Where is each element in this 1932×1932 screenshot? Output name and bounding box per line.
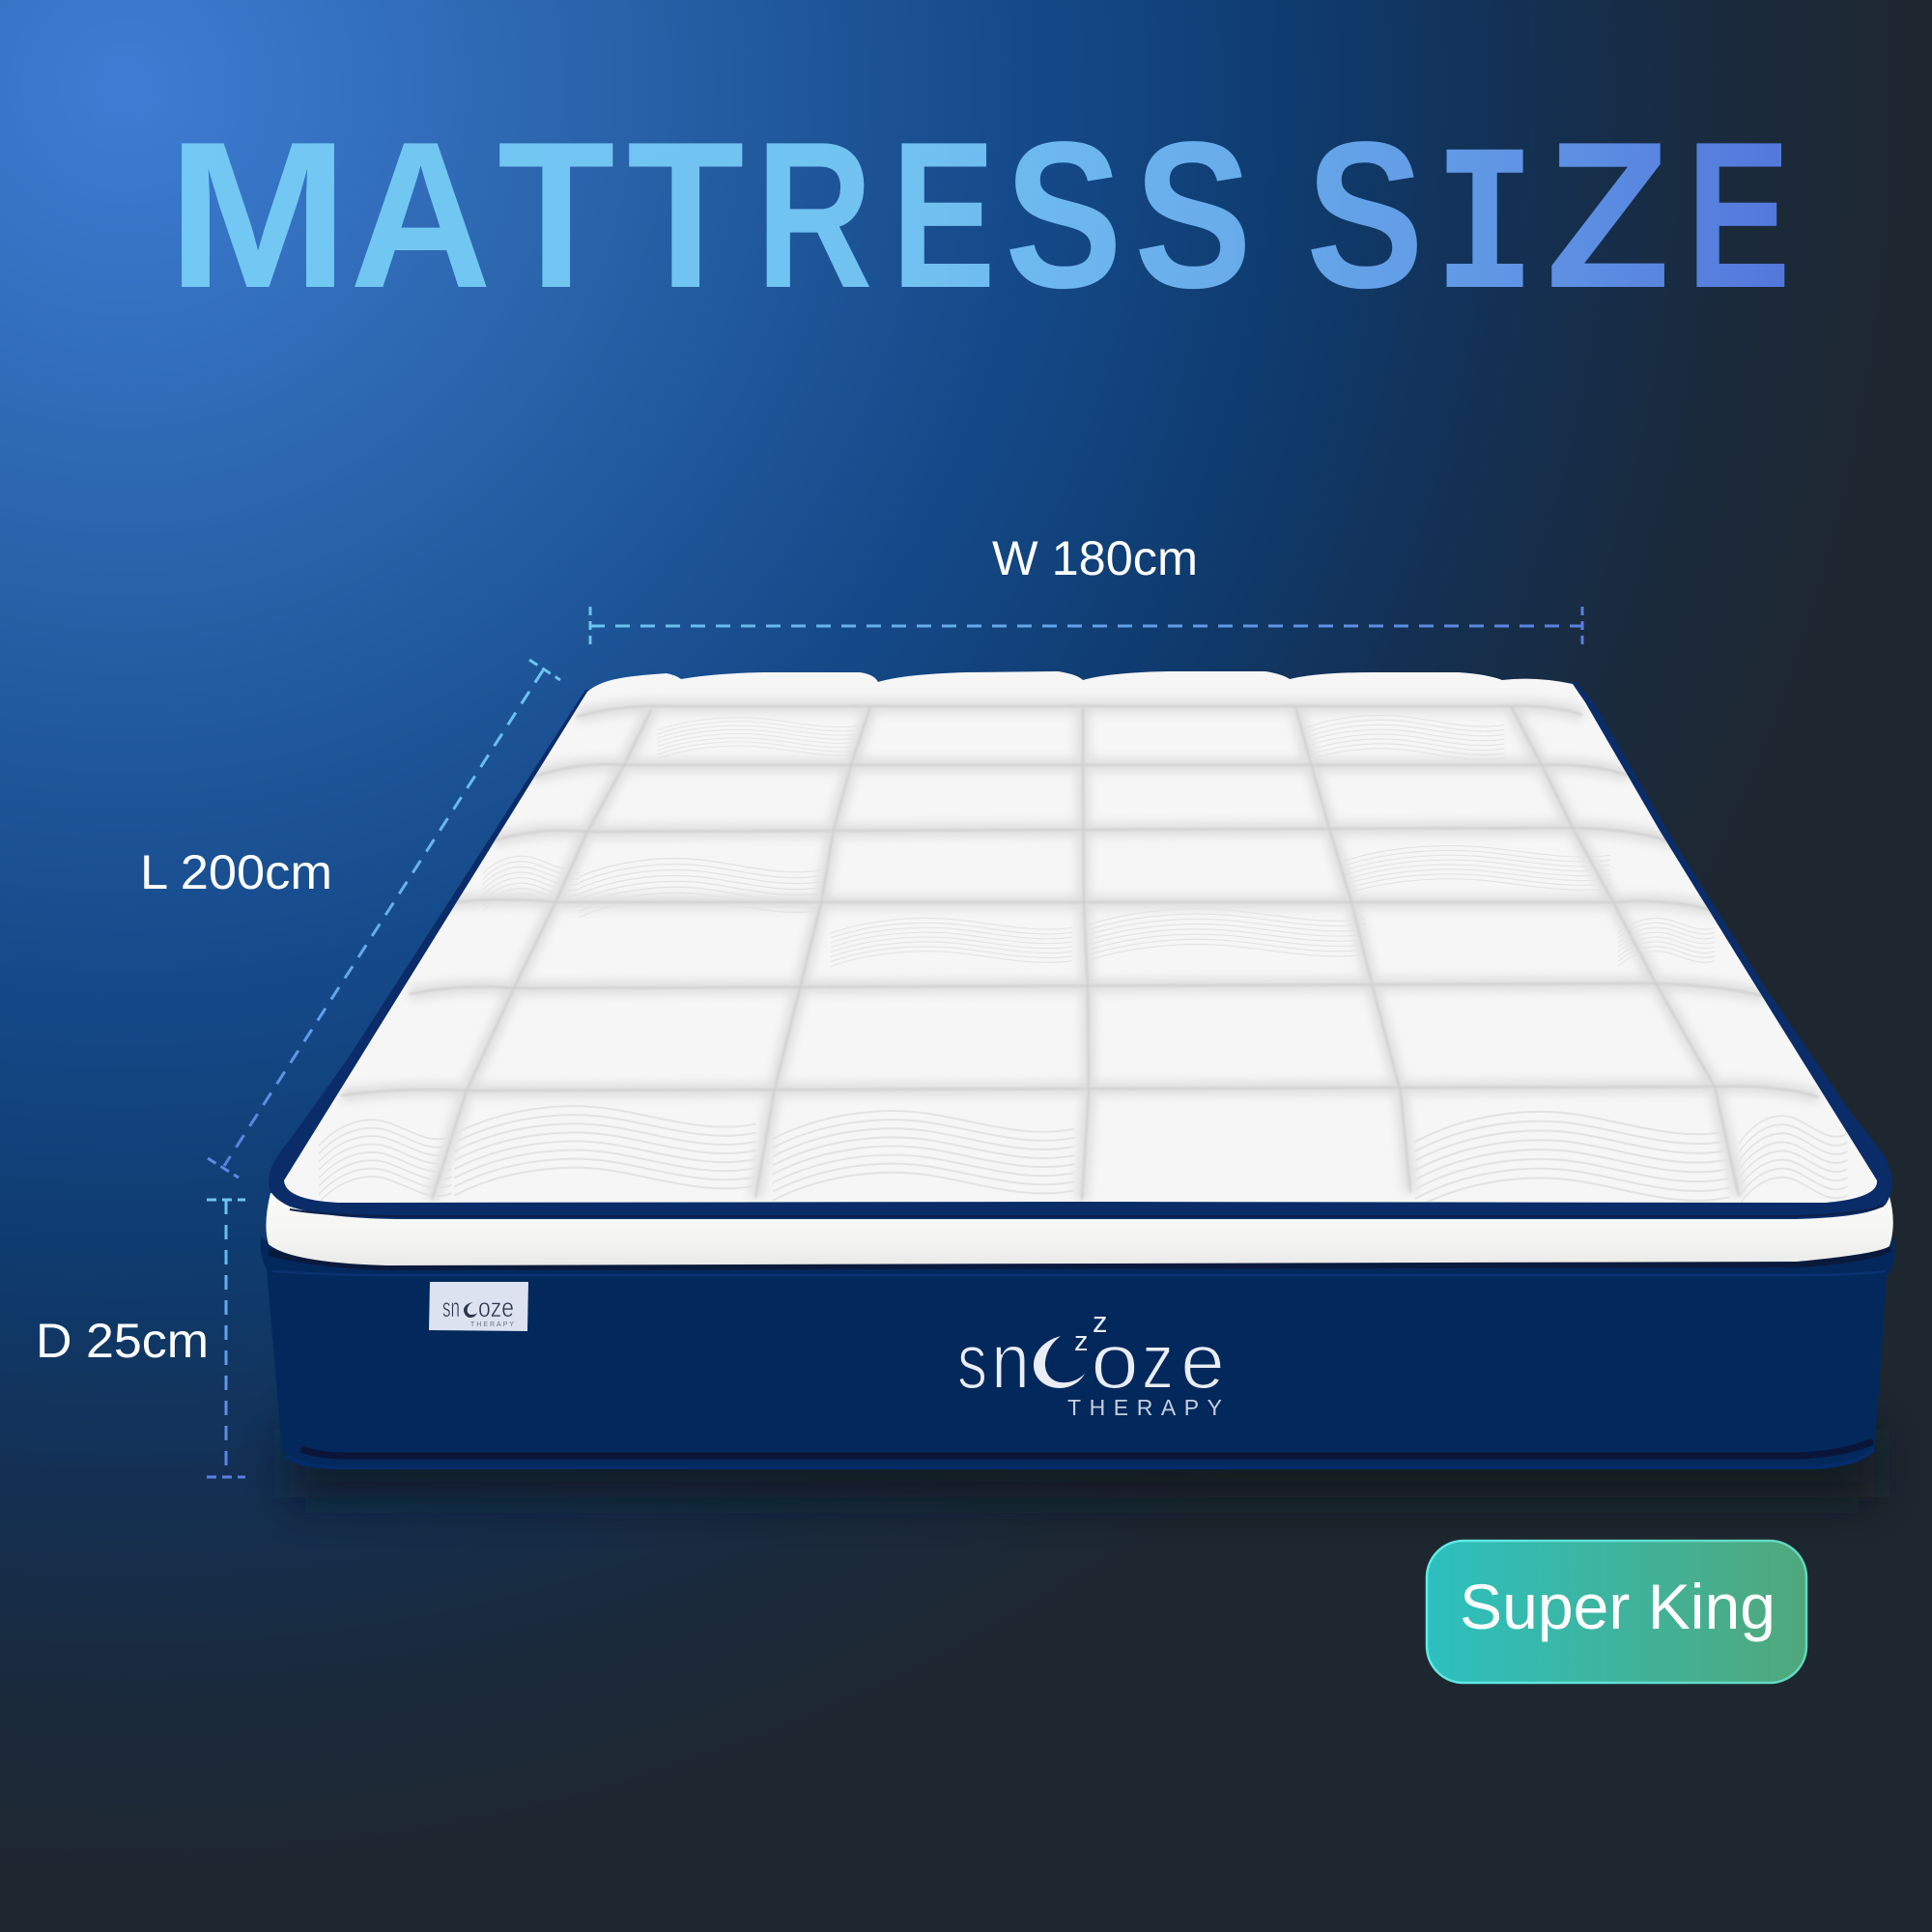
sewn label tag: oze: [478, 1293, 514, 1322]
mattress: [261, 671, 1895, 1497]
width dimension line: [590, 607, 1582, 645]
snooze therapy logo: z: [1142, 1318, 1174, 1406]
length dimension line: [208, 660, 560, 1178]
title: S: [1005, 98, 1122, 331]
floor shadow: [290, 1430, 1874, 1497]
tag crescent moon: [464, 1302, 477, 1318]
quilted top surface: [284, 671, 1877, 1203]
title: R: [755, 98, 873, 331]
crescent moon: [1034, 1336, 1085, 1388]
title: S: [1134, 98, 1252, 331]
snooze therapy logo: z: [1074, 1326, 1088, 1357]
size badge: Super King: Super King: [1460, 1571, 1776, 1642]
quilting detail: [319, 706, 1847, 1208]
snooze therapy logo: THERAPY: [1067, 1395, 1222, 1420]
title: E: [1687, 98, 1791, 331]
snooze therapy logo: s: [957, 1318, 987, 1406]
depth label: D 25cm: [36, 1314, 209, 1368]
snooze therapy logo: e: [1180, 1318, 1225, 1406]
white foam band: [266, 1193, 1893, 1265]
snooze therapy logo: z: [1093, 1305, 1107, 1339]
title: A: [350, 98, 492, 331]
sewn label tag: THERAPY: [470, 1321, 514, 1328]
seam soft shading: [341, 706, 1819, 1200]
length label: L 200cm: [140, 845, 332, 899]
sewn label tag: sn: [442, 1293, 460, 1322]
fabric wave texture: [319, 715, 1847, 1208]
title: T: [497, 98, 614, 331]
title: [167, 98, 1791, 350]
width label: W 180cm: [992, 531, 1198, 585]
title: M: [167, 98, 349, 331]
blue piping: [269, 682, 1892, 1219]
size badge: Super King: [1427, 1541, 1806, 1683]
seam lines: [341, 706, 1819, 1200]
side seam lines: [269, 1248, 1890, 1266]
title: E: [892, 98, 996, 331]
title: S: [1306, 98, 1424, 331]
title: Z: [1546, 98, 1670, 331]
snooze therapy logo: n: [991, 1318, 1030, 1406]
sewn label tag: [429, 1282, 528, 1331]
snooze therapy logo: [957, 1305, 1225, 1420]
mattress side panel: [261, 1236, 1895, 1468]
snooze therapy logo: o: [1091, 1318, 1139, 1406]
title: T: [627, 98, 744, 331]
depth dimension line: [207, 1200, 245, 1477]
title: I: [1434, 113, 1536, 350]
